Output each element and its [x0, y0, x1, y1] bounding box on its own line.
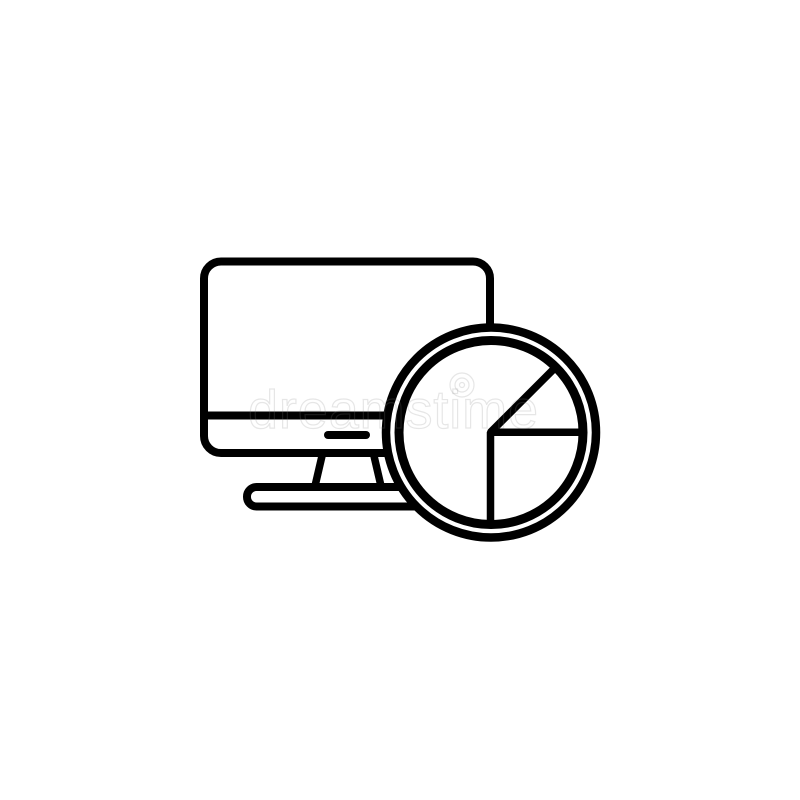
icon: pie chart in double ring [386, 328, 596, 538]
monitor base [247, 487, 447, 506]
watermark spiral logo [450, 373, 474, 397]
monitor screen frame [204, 262, 490, 453]
screen divider line [204, 412, 400, 420]
icon: desktop monitor [204, 262, 490, 506]
monitor stand [315, 456, 381, 486]
watermark [248, 373, 538, 440]
outer ring [386, 328, 596, 538]
inner ring [399, 340, 583, 524]
watermark text: dreamstime [248, 380, 538, 440]
monitor button [328, 431, 366, 439]
pie slice lines [490, 367, 584, 526]
